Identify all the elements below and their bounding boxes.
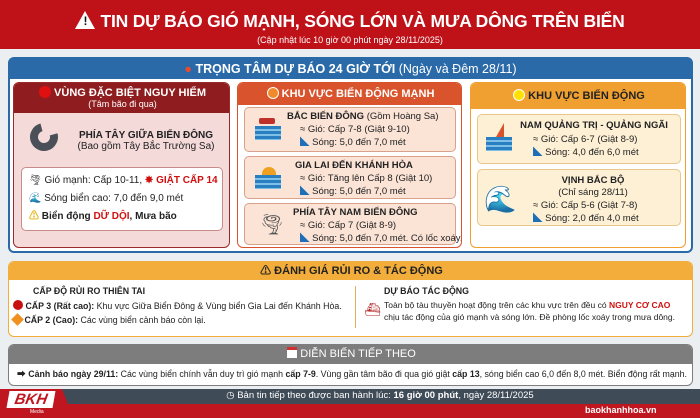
icon: typhoon — [25, 118, 63, 156]
impact forecast — [364, 286, 675, 322]
sub: Gia Lai: GIA LAI ĐẾN KHÁNH HÒA — [295, 160, 413, 171]
card heading — [471, 83, 687, 109]
sub: Nam Quang Tri: NAM QUẢNG TRỊ - QUẢNG NGÃI — [520, 120, 668, 131]
sub: Tay Nam: ≈ Gió: Cấp 7 (Giật 8-9) — [300, 220, 396, 231]
panel: next developments — [8, 344, 693, 386]
panel heading: ⚠ ĐÁNH GIÁ RỦI RO & TÁC ĐỘNG — [260, 265, 443, 277]
panel: risk assessment — [8, 261, 693, 337]
impact forecast: Toàn bộ tàu thuyền hoạt động trên các khu vực trên đều có NGUY CƠ CAO — [384, 300, 670, 310]
logo: BKH — [13, 391, 49, 408]
risk levels: CẤP ĐỘ RỦI RO THIÊN TAI — [33, 286, 145, 296]
card heading: KHU VỰC BIỂN ĐỘNG — [528, 90, 645, 102]
logo: Media — [30, 409, 44, 415]
card: rough sea — [470, 82, 686, 248]
impact forecast: ⛴ — [364, 302, 381, 317]
sub: Bac Bien Dong — [244, 107, 456, 152]
panel: 24h forecast — [8, 57, 693, 253]
risk levels — [11, 286, 342, 326]
sub: Vinh Bac Bo: VỊNH BẮC BỘ — [562, 175, 624, 186]
sub: Bac Bien Dong: ≈ Gió: Cấp 7-8 (Giật 9-10) — [300, 124, 410, 135]
sub: Tay Nam: PHÍA TÂY NAM BIỂN ĐÔNG — [293, 207, 418, 218]
subtitle: (Cập nhật lúc 10 giờ 00 phút ngày 28/11/2025) — [257, 35, 443, 45]
card heading: KHU VỰC BIỂN ĐỘNG MẠNH — [282, 88, 434, 100]
location text — [77, 128, 214, 152]
website: baokhanhhoa.vn — [585, 405, 657, 415]
sub: Bac Bien Dong: ◣ Sóng: 5,0 đến 7,0 mét — [300, 137, 406, 148]
title: TIN DỰ BÁO GIÓ MẠNH, SÓNG LỚN VÀ MƯA DÔNG TRÊN BIỂN — [100, 11, 625, 31]
sub: Nam Quang Tri: ≈ Gió: Cấp 6-7 (Giật 8-9) — [533, 134, 637, 145]
impact forecast: DỰ BÁO TÁC ĐỘNG — [384, 286, 469, 296]
panel heading — [10, 59, 691, 79]
card heading: (Tâm bão đi qua) — [88, 99, 157, 109]
sub: Tay Nam — [244, 203, 456, 245]
details box: 🌪 Gió mạnh: Cấp 10-11, ✸ GIẬT CẤP 14 — [29, 175, 218, 186]
panel heading — [9, 262, 694, 280]
card heading: VÙNG ĐẶC BIỆT NGUY HIỂM — [54, 87, 206, 99]
risk levels: CẤP 3 (Rất cao): Khu vực Giữa Biển Đông & Vùng biển Gia Lai đến Khánh Hòa. — [25, 301, 342, 311]
forecast text: ➡ Cảnh báo ngày 29/11: Các vùng biển chính vẫn duy trì gió mạnh cấp 7-9. Vùng gần tâm bão đi qua gió giật cấp 13, sóng biển cao 6,0 đến 8,0 mét. Biển động rất mạnh. — [17, 369, 687, 379]
sub: Vinh Bac Bo: ◣ Sóng: 2,0 đến 4,0 mét — [533, 213, 639, 224]
footer — [0, 389, 700, 418]
details box — [21, 167, 223, 231]
card: strong sea — [237, 82, 462, 248]
title: ! — [83, 14, 87, 28]
panel heading — [9, 345, 694, 364]
header band — [0, 0, 700, 49]
location text: PHÍA TÂY GIỮA BIỂN ĐÔNG — [79, 130, 213, 141]
panel heading: DIỄN BIẾN TIẾP THEO — [300, 348, 416, 360]
details box: 🌊 Sóng biển cao: 7,0 đến 9,0 mét — [29, 193, 183, 204]
sub: Vinh Bac Bo: (Chỉ sáng 28/11) — [558, 187, 628, 198]
sub: Bac Bien Dong: BẮC BIỂN ĐÔNG (Gồm Hoàng Sa) — [287, 111, 439, 122]
sub: Vinh Bac Bo — [477, 169, 681, 226]
sub: Vinh Bac Bo: ≈ Gió: Cấp 5-6 (Giật 7-8) — [533, 200, 637, 211]
details box: ⚠ Biển động DỮ DỘI, Mưa bão — [29, 211, 177, 222]
sub: Nam Quang Tri: ◣ Sóng: 4,0 đến 6,0 mét — [533, 147, 639, 158]
sub: Vinh Bac Bo: 🌊 — [484, 184, 516, 214]
card: special danger — [13, 82, 230, 248]
sub: Nam Quang Tri — [477, 114, 681, 164]
sub: Tay Nam: 🌪 — [259, 214, 284, 236]
sub: Gia Lai: ≈ Gió: Tăng lên Cấp 8 (Giật 10) — [300, 173, 432, 184]
sub: Tay Nam: ◣ Sóng: 5,0 đến 7,0 mét. Có lốc xoáy. — [300, 233, 462, 244]
card heading — [14, 83, 231, 113]
impact forecast: chịu tác động của gió mạnh và sóng lớn. Đề phòng lốc xoáy trong mưa dông. — [384, 312, 675, 322]
sub: Gia Lai: ◣ Sóng: 5,0 đến 7,0 mét — [300, 186, 406, 197]
location text: (Bao gồm Tây Bắc Trường Sa) — [77, 141, 214, 152]
risk levels: CẤP 2 (Cao): Các vùng biển cảnh báo còn lại. — [24, 315, 206, 325]
next bulletin: ◷ Bản tin tiếp theo được ban hành lúc: 16 giờ 00 phút, ngày 28/11/2025 — [226, 390, 534, 401]
panel heading: ● TRỌNG TÂM DỰ BÁO 24 GIỜ TỚI (Ngày và Đêm 28/11) — [184, 62, 517, 76]
logo — [6, 391, 56, 415]
card heading — [238, 83, 463, 105]
sub: Gia Lai — [244, 156, 456, 199]
